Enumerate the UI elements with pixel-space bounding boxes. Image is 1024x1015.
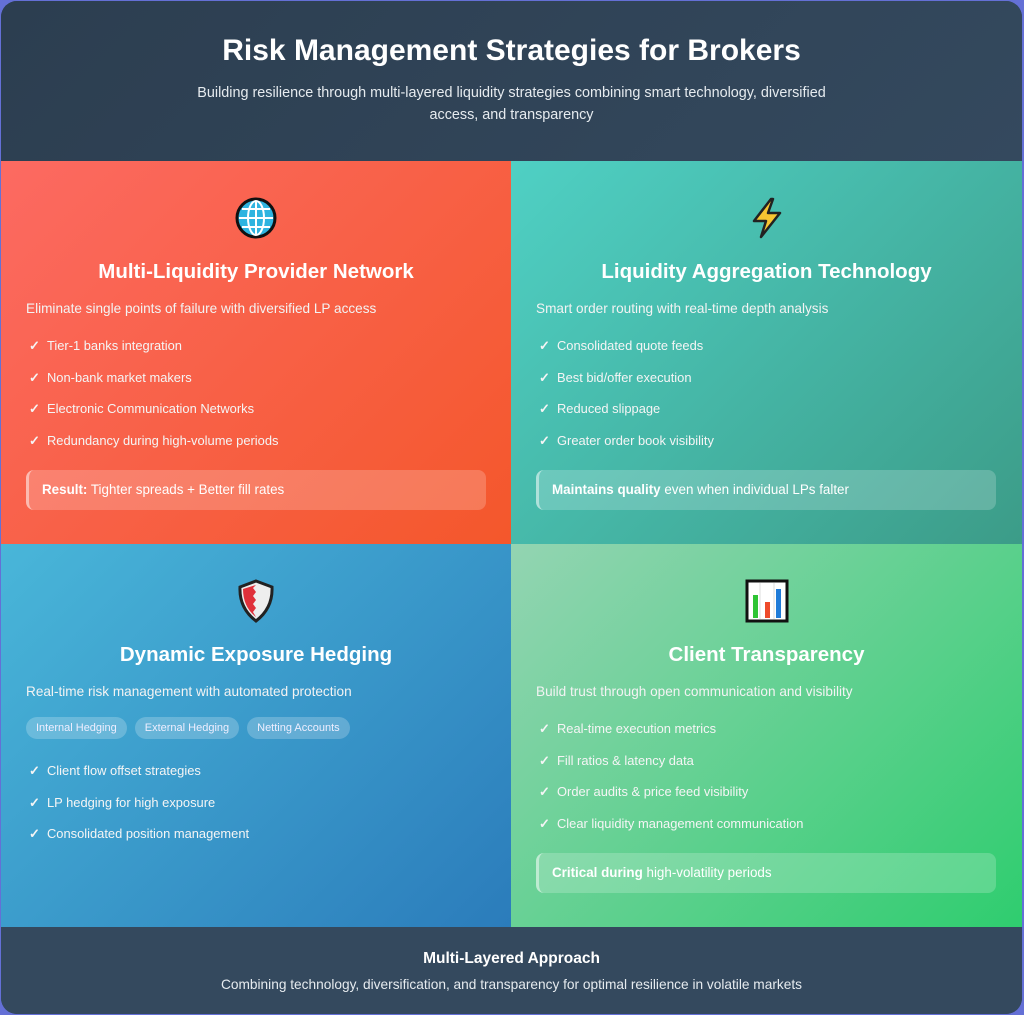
checklist: LP hedging for high exposure <box>47 795 215 810</box>
panel: liquidity aggregation technology <box>511 161 1022 544</box>
icon: shield <box>238 579 274 623</box>
callout box: Maintains quality even when individual LPs falter <box>552 482 849 497</box>
checklist: ✓ <box>29 401 40 416</box>
checklist: ✓ <box>539 816 550 831</box>
checklist: Reduced slippage <box>557 401 660 416</box>
callout box: Critical during high-volatility periods <box>552 865 772 880</box>
description: Smart order routing with real-time depth analysis <box>536 301 828 316</box>
panel: client transparency <box>511 544 1022 927</box>
header <box>1 1 1022 161</box>
heading: Multi-Liquidity Provider Network <box>98 260 414 283</box>
heading: Liquidity Aggregation Technology <box>601 260 932 283</box>
checklist: ✓ <box>539 721 550 736</box>
checklist: Best bid/offer execution <box>557 370 691 385</box>
callout box <box>536 853 996 893</box>
checklist: Consolidated position management <box>47 826 249 841</box>
checklist: Real-time execution metrics <box>557 721 716 736</box>
checklist: ✓ <box>29 795 40 810</box>
checklist: ✓ <box>29 370 40 385</box>
description: Real-time risk management with automated protection <box>26 684 352 699</box>
panel: multi-liquidity provider network <box>1 161 511 544</box>
description: Build trust through open communication and visibility <box>536 684 853 699</box>
icon: lightning <box>752 198 782 238</box>
checklist: Tier-1 banks integration <box>47 338 182 353</box>
checklist: ✓ <box>29 338 40 353</box>
checklist <box>539 338 714 448</box>
checklist: Clear liquidity management communication <box>557 816 803 831</box>
checklist: ✓ <box>539 753 550 768</box>
description: Eliminate single points of failure with diversified LP access <box>26 301 376 316</box>
heading: Client Transparency <box>669 643 864 666</box>
result box <box>26 470 486 510</box>
tags: Netting Accounts <box>257 722 340 734</box>
tags: Internal Hedging <box>36 722 117 734</box>
checklist: Consolidated quote feeds <box>557 338 703 353</box>
icon: bar chart <box>746 580 788 622</box>
checklist: ✓ <box>29 433 40 448</box>
checklist <box>539 721 803 831</box>
checklist: Redundancy during high-volume periods <box>47 433 278 448</box>
footer title: Multi-Layered Approach <box>423 950 600 967</box>
checklist <box>29 338 278 448</box>
checklist: Fill ratios & latency data <box>557 753 694 768</box>
subtitle: Building resilience through multi-layered liquidity strategies combining smart technology, diversified access, and transparency <box>197 85 826 123</box>
result box: Result: Tighter spreads + Better fill rates <box>42 482 284 497</box>
footer <box>1 927 1022 1015</box>
checklist: ✓ <box>29 826 40 841</box>
checklist: ✓ <box>539 433 550 448</box>
checklist: ✓ <box>539 370 550 385</box>
tags <box>26 717 350 739</box>
tags: External Hedging <box>145 722 229 734</box>
checklist: ✓ <box>539 338 550 353</box>
checklist: ✓ <box>539 784 550 799</box>
checklist: Electronic Communication Networks <box>47 401 254 416</box>
panel: dynamic exposure hedging <box>1 544 511 927</box>
heading: Dynamic Exposure Hedging <box>120 643 392 666</box>
footer text: Combining technology, diversification, and transparency for optimal resilience in volatile markets <box>221 977 802 992</box>
checklist <box>29 763 249 841</box>
icon: globe <box>236 198 276 238</box>
checklist: Client flow offset strategies <box>47 763 201 778</box>
checklist: ✓ <box>29 763 40 778</box>
checklist: Greater order book visibility <box>557 433 714 448</box>
checklist: Non-bank market makers <box>47 370 192 385</box>
checklist: ✓ <box>539 401 550 416</box>
checklist: Order audits & price feed visibility <box>557 784 748 799</box>
callout box <box>536 470 996 510</box>
title: Risk Management Strategies for Brokers <box>222 34 801 67</box>
